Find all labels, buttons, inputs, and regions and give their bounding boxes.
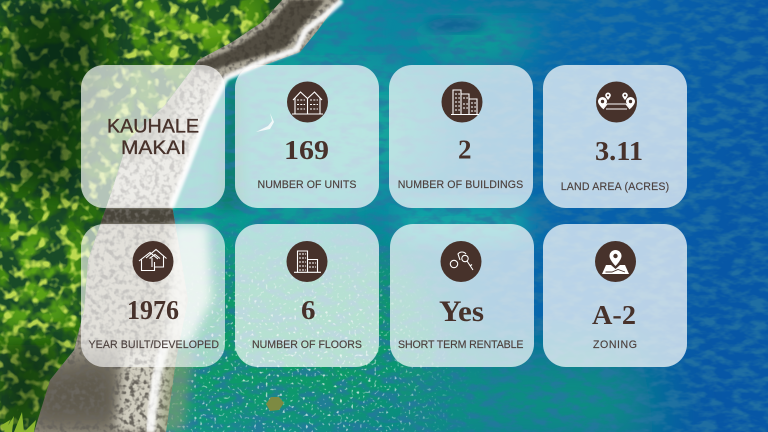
icon: houses (132, 241, 174, 282)
panel: number of buildings (389, 65, 533, 208)
icon: map pins on plot (596, 82, 637, 122)
value: 6: 6 (301, 295, 316, 325)
label: year built: YEAR BUILT/DEVELOPED (88, 339, 219, 351)
panel: year built (81, 224, 225, 367)
surf swirl (256, 113, 274, 132)
value: 3.11: 3.11 (595, 136, 643, 166)
panel: title card (81, 65, 225, 208)
value: A-2: A-2 (592, 300, 636, 330)
panel: number of floors (235, 224, 379, 367)
icon: tower building (286, 241, 328, 282)
heading: Kauhale Makai (107, 116, 199, 159)
shore (34, 0, 340, 432)
label: number of units: NUMBER OF UNITS (258, 179, 356, 191)
panel: number of units (235, 65, 379, 208)
label: zoning: ZONING (593, 339, 637, 351)
value: Yes: Yes (439, 295, 484, 328)
value: 1976: 1976 (127, 295, 179, 325)
panel: zoning (543, 224, 687, 367)
submerged rock (266, 397, 284, 411)
panel: land area (543, 65, 687, 208)
green shallow water (150, 250, 450, 432)
heading: Kauhale Makai: MAKAI (121, 137, 186, 159)
value: 169: 169 (284, 135, 329, 165)
label: number of floors: NUMBER OF FLOORS (252, 339, 362, 351)
label: number of buildings: NUMBER OF BUILDINGS (398, 179, 523, 191)
icon: map pin on map (595, 241, 636, 282)
label: land area: LAND AREA (ACRES) (561, 181, 669, 193)
panel: short term rentable (390, 224, 534, 367)
label: short term rentable: SHORT TERM RENTABLE (398, 339, 524, 351)
icon: keys (440, 241, 482, 282)
icon: twin houses (287, 82, 328, 122)
foam and surf line (165, 225, 212, 345)
icon: office buildings (442, 82, 482, 122)
forest (0, 0, 282, 432)
value: 2: 2 (458, 135, 472, 165)
heading: Kauhale Makai: KAUHALE (107, 116, 199, 138)
